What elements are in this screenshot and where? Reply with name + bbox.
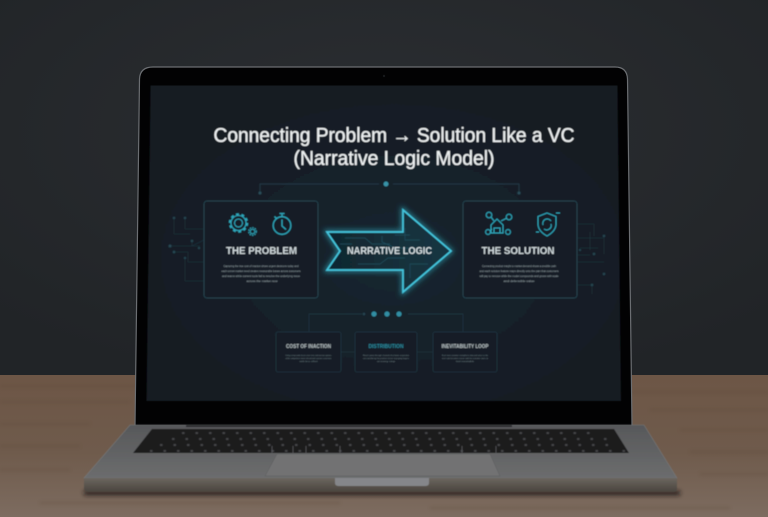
- front lip: [84, 478, 677, 492]
- circuit pattern: [340, 228, 428, 278]
- lower connector with dots: [309, 311, 463, 352]
- body text: while competitors move ahead and capture customers: [286, 357, 332, 360]
- card: inevitability loop: [433, 332, 497, 372]
- table shadow under laptop: [84, 491, 680, 495]
- panel: the problem: [204, 201, 318, 298]
- body text: next sale becomes easier and the outcome starts to: [442, 357, 489, 360]
- background: dark wall: [0, 0, 768, 375]
- label: narrative logic: NARRATIVE LOGIC: [347, 245, 432, 257]
- title: [214, 125, 574, 170]
- arrow: narrative logic: [327, 210, 451, 292]
- key legends: [150, 433, 625, 451]
- body text: Each new customer strengthens data and value so the: [442, 354, 489, 357]
- lid notch: [335, 478, 429, 486]
- body text: the problem: [222, 264, 301, 283]
- heading: the solution: THE SOLUTION: [482, 245, 554, 257]
- body text: with less effort: [300, 360, 318, 363]
- icon: shield: [536, 213, 560, 236]
- body text: [286, 354, 332, 363]
- panel: the solution: [463, 201, 577, 298]
- keyboard deck: [84, 425, 677, 478]
- icon: gears: [230, 214, 256, 235]
- laptop screen: [146, 86, 621, 401]
- laptop lid: [135, 67, 632, 426]
- body text: the problem: Capturing the true cost of inaction drives urgent decisions today and: [224, 264, 299, 268]
- body text: at every step: [377, 360, 396, 363]
- title: Connecting Problem → Solution Like a VC: [214, 125, 574, 147]
- body text: the solution: Connecting product insight to market demand shows a credible path: [482, 264, 556, 268]
- heading: INEVITABILITY LOOP: [442, 344, 489, 350]
- camera: [383, 75, 385, 77]
- left circuit traces: [168, 217, 204, 281]
- icon: network with house: [486, 212, 512, 234]
- background: wooden table: [0, 375, 768, 517]
- right circuit traces: [577, 224, 605, 294]
- laptop base: [84, 425, 677, 492]
- icon: stopwatch: [273, 214, 291, 234]
- card: cost of inaction: [276, 332, 341, 372]
- heading: the problem: THE PROBLEM: [226, 245, 297, 257]
- body text: the solution: and defensible value: [504, 279, 535, 283]
- card: distribution: [355, 332, 417, 372]
- hinge shadow: [186, 425, 512, 427]
- body text: Delay compounds losses over time and narrows options: [286, 354, 332, 357]
- trackpad: [265, 454, 500, 476]
- body text: [442, 354, 489, 363]
- body text: Reach grows through channels that lower acquisition: [363, 354, 410, 357]
- top connector: [259, 182, 520, 194]
- body text: [363, 354, 410, 363]
- body text: the solution: [480, 264, 559, 283]
- body text: cost and bring the product closer to paying buyers: [363, 357, 410, 360]
- keyboard: [133, 429, 629, 453]
- heading: DISTRIBUTION: [368, 344, 404, 350]
- title: (Narrative Logic Model): [294, 148, 494, 170]
- body text: the problem: each unmet market need creates measurable losses across customers: [222, 269, 301, 273]
- heading: COST OF INACTION: [286, 344, 331, 350]
- body text: the solution: and each solution feature maps directly onto the pain that customers: [480, 269, 559, 273]
- body text: the problem: and teams while current tools fail to resolve the underlying issue: [222, 274, 300, 278]
- body text: feel inevitable: [456, 360, 475, 363]
- body text: the solution: will pay to remove while the model compounds and grows with scale: [480, 274, 559, 278]
- body text: the problem: across the market now: [246, 279, 278, 283]
